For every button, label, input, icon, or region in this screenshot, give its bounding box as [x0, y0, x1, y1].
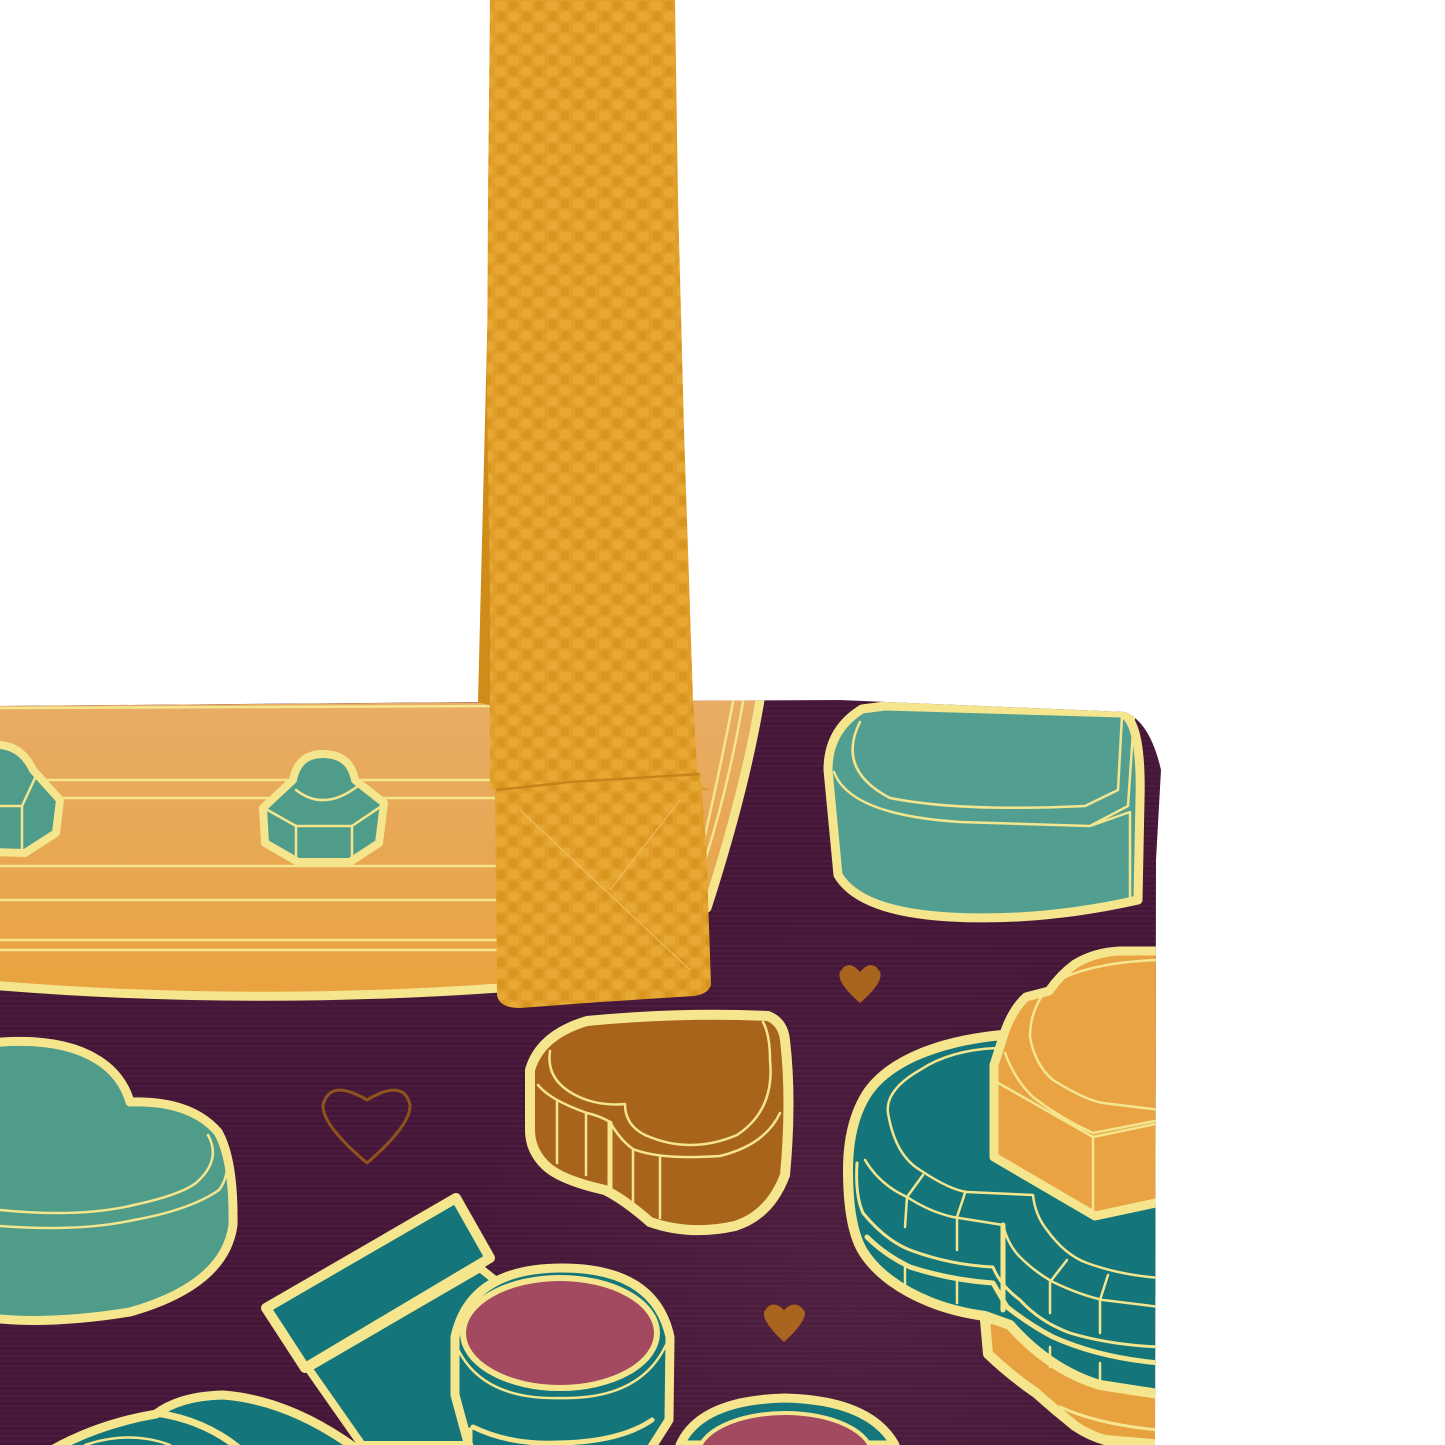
teal box with lid: [266, 1198, 520, 1445]
small filled heart upper: [839, 965, 881, 1003]
orange base of stacked cookies: [985, 1300, 1165, 1445]
teal cloud heart left: [0, 1041, 233, 1320]
small filled heart lower: [764, 1304, 805, 1342]
bag body: [0, 700, 1161, 1445]
brown heart box centre: [530, 1015, 788, 1230]
second pink jar bottom: [680, 1398, 895, 1445]
round jar with pink lid: [455, 1268, 670, 1445]
teal stacked cookies right: [848, 1035, 1165, 1395]
strap back edge: [478, 130, 497, 706]
orange heart block on top of stack: [993, 951, 1165, 1218]
hex nut icon left: [0, 745, 60, 853]
strap upper layer: [487, 0, 710, 790]
fabric handle strap: [478, 0, 711, 1008]
small outlined heart: [323, 1090, 410, 1163]
teal rounded heart box top right: [828, 706, 1140, 918]
strap folded flap: [495, 774, 711, 1008]
teal shape bottom left: [52, 1395, 358, 1445]
hex nut icon centre: [263, 754, 386, 864]
large orange cake shape under handle: [0, 700, 761, 998]
